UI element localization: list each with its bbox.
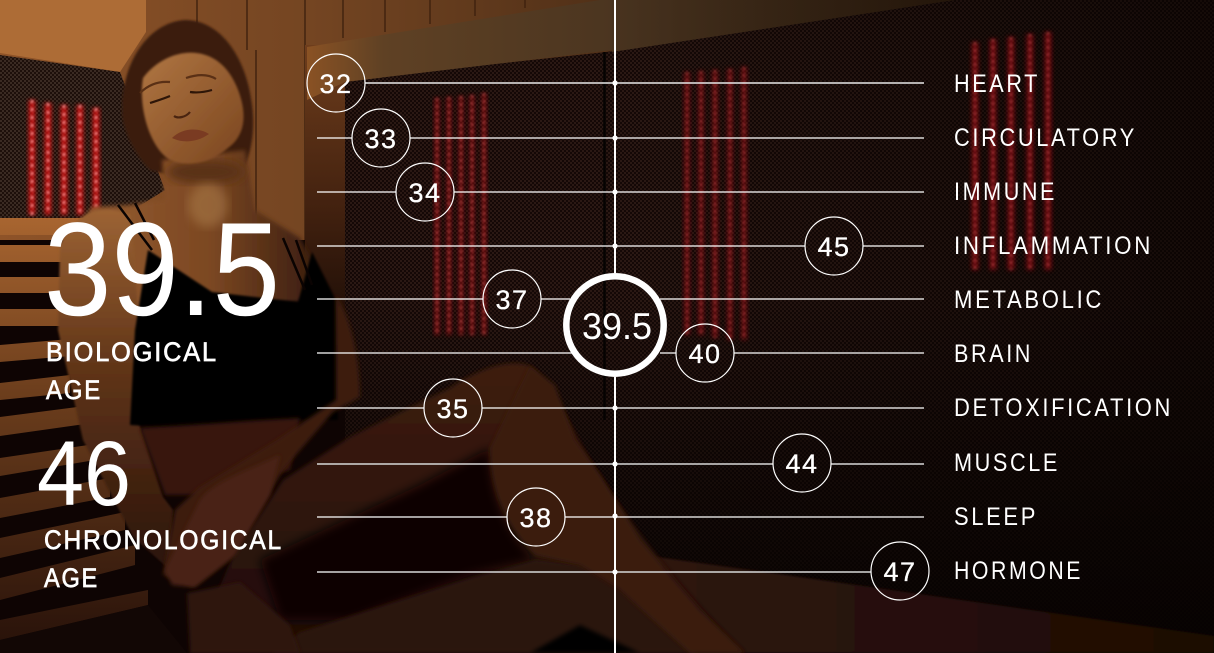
biological age label: BIOLOGICAL: [46, 337, 218, 367]
row: sleep: SLEEP: [954, 503, 1038, 531]
lips: [172, 129, 209, 141]
plank grooves: [86, 0, 525, 240]
row: brain: [317, 324, 1033, 382]
row: muscle: MUSCLE: [954, 449, 1060, 477]
row: metabolic: 37: [495, 285, 529, 315]
row: brain: BRAIN: [954, 340, 1033, 368]
panel seam: [603, 52, 606, 420]
row: immune: 34: [408, 178, 442, 208]
gap below legs: [530, 625, 640, 653]
dark fold under knee: [260, 448, 535, 620]
bench slats: [0, 218, 148, 640]
belly: [140, 418, 300, 495]
row: inflammation: 45: [817, 232, 851, 262]
row: hormone: [317, 542, 1083, 600]
wood wall: [0, 0, 620, 240]
left arm: [58, 210, 173, 570]
row: detoxification: DETOXIFICATION: [954, 394, 1173, 422]
row: hormone: HORMONE: [954, 557, 1083, 585]
hair: [122, 20, 253, 190]
top wood band: [307, 0, 612, 100]
row: inflammation: INFLAMMATION: [954, 232, 1153, 260]
hand: [165, 455, 280, 587]
row: sleep: 38: [519, 503, 553, 533]
top wood band right: [612, 0, 955, 52]
face: [142, 53, 244, 164]
floor rail: [650, 556, 1214, 653]
row: heart: HEART: [954, 70, 1040, 98]
row: inflammation: [317, 217, 1153, 275]
dark left floor: [0, 605, 187, 653]
row: muscle: [317, 434, 1060, 492]
woman: [0, 20, 745, 653]
row: immune: IMMUNE: [954, 178, 1057, 206]
row: hormone: 47: [883, 557, 917, 587]
shading: [345, 300, 1214, 653]
left plank: [305, 45, 350, 345]
row: detoxification: 35: [436, 394, 470, 424]
row: metabolic: METABOLIC: [954, 286, 1104, 314]
center dark panel: [345, 52, 606, 653]
LED group 4: [975, 32, 1048, 270]
biological age label: AGE: [46, 375, 102, 405]
row: muscle: 44: [785, 449, 819, 479]
neck highlight: [188, 183, 228, 227]
row: metabolic: [317, 270, 1104, 328]
thigh: [190, 363, 745, 653]
right arm: [163, 295, 360, 587]
row: circulatory: CIRCULATORY: [954, 124, 1137, 152]
straps: [118, 203, 312, 290]
black top: [130, 250, 338, 428]
row: heart: 32: [319, 69, 353, 99]
shin: [490, 366, 745, 653]
row: immune: [317, 163, 1057, 221]
chronological age label: CHRONOLOGICAL: [44, 525, 283, 555]
left dark panel: [0, 55, 165, 218]
row: sleep: [317, 488, 1038, 546]
face features: [140, 75, 216, 117]
row: brain: 40: [688, 339, 722, 369]
LED group 3: [687, 67, 744, 340]
lower leg: [270, 560, 700, 653]
average marker: 39.5: 39.5: [582, 306, 652, 347]
lower forearm: [187, 582, 300, 653]
row: circulatory: 33: [364, 124, 398, 154]
average marker: 39.5: [566, 276, 664, 374]
LED group 2: [437, 93, 484, 335]
chronological age label: [44, 525, 283, 593]
biological age value: 39.5: [44, 196, 280, 344]
under-chin shadow: [167, 160, 243, 184]
biological age label: [46, 337, 218, 405]
row: heart: [307, 54, 1040, 112]
right dark panel: [606, 0, 1214, 653]
left ledge: [0, 0, 146, 72]
vertical axis: [614, 0, 616, 653]
LED group 1: [32, 100, 96, 215]
chronological age label: AGE: [44, 563, 99, 593]
neck and chest: [60, 150, 335, 310]
chronological age value: 46: [37, 423, 131, 525]
row: circulatory: [317, 109, 1137, 167]
row: detoxification: [317, 379, 1173, 437]
